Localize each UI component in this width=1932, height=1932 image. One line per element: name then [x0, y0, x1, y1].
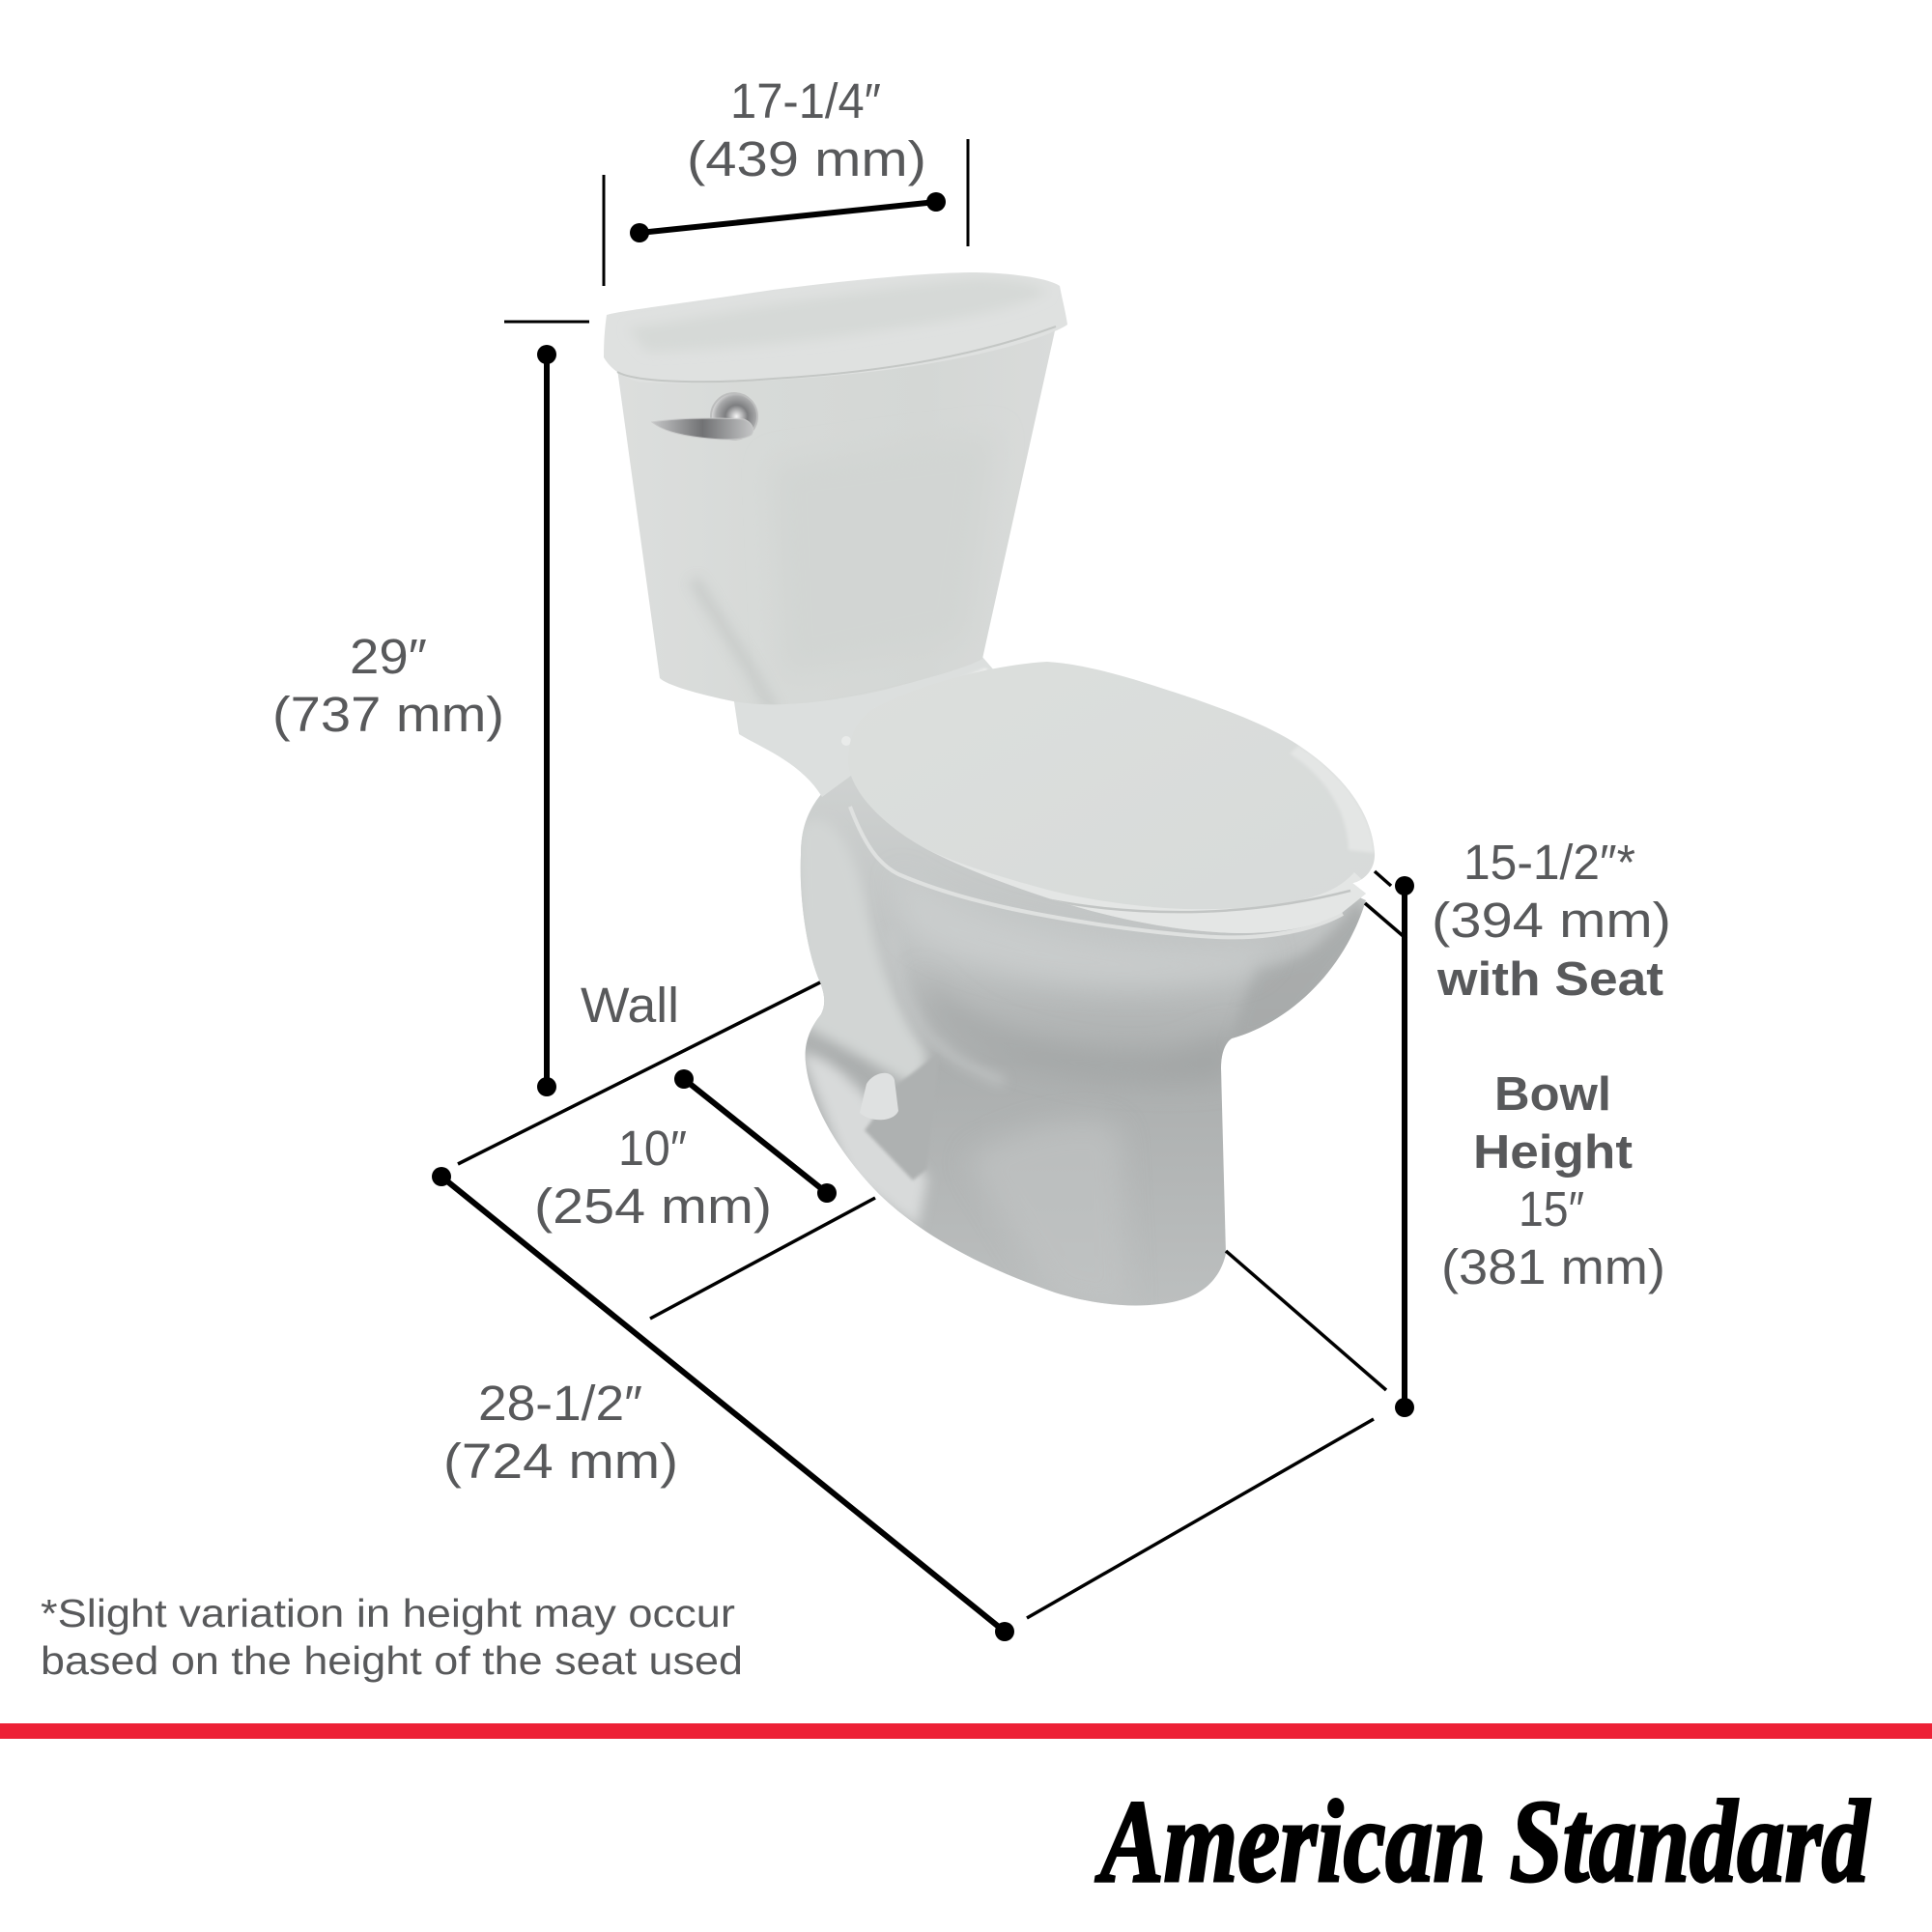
label: wall: Wall	[581, 978, 679, 1033]
dimension lines	[432, 139, 1414, 1641]
footnote: *Slight variation in height may occur	[41, 1591, 735, 1635]
label: overall depth: 28-1/2″	[478, 1376, 642, 1431]
label: rough-in: (254 mm)	[534, 1179, 772, 1234]
height dimension: 29	[504, 322, 589, 1096]
label: overall height: 29″	[350, 629, 427, 684]
neck between tank and bowl	[733, 657, 995, 797]
red divider bar	[0, 1723, 1932, 1739]
label: rough-in: 10″	[618, 1121, 687, 1176]
depth dimension: 28-1/2	[432, 1167, 1386, 1641]
flange bolt cap	[860, 1073, 898, 1120]
tank lid	[604, 272, 1067, 383]
label: tank width: (439 mm)	[687, 131, 926, 186]
flush handle	[652, 393, 757, 440]
label: height with seat: 15-1/2″*	[1463, 835, 1635, 890]
seat and bowl height dimension	[1365, 871, 1414, 1417]
toilet illustration	[604, 272, 1381, 1314]
label: bowl height: (381 mm)	[1441, 1239, 1665, 1294]
bowl rim highlight	[850, 807, 1343, 937]
toilet seat lid	[848, 662, 1381, 952]
label: bowl height: Height	[1473, 1126, 1633, 1179]
label: overall height: (737 mm)	[272, 687, 504, 742]
footnote: based on the height of the seat used	[41, 1638, 743, 1683]
label: height with seat: (394 mm)	[1432, 893, 1671, 948]
toilet bowl body	[797, 763, 1372, 1314]
width dimension: 17-1/4	[604, 139, 968, 286]
label: overall depth: (724 mm)	[443, 1434, 678, 1489]
wall line	[458, 982, 820, 1164]
rough-in dimension: 10	[650, 1069, 875, 1319]
label: height with seat: with Seat	[1436, 953, 1663, 1006]
label: bowl height: 15″	[1519, 1181, 1584, 1236]
label: bowl height: Bowl	[1494, 1068, 1611, 1121]
tank body	[617, 327, 1056, 710]
label: tank width: 17-1/4″	[730, 73, 881, 128]
